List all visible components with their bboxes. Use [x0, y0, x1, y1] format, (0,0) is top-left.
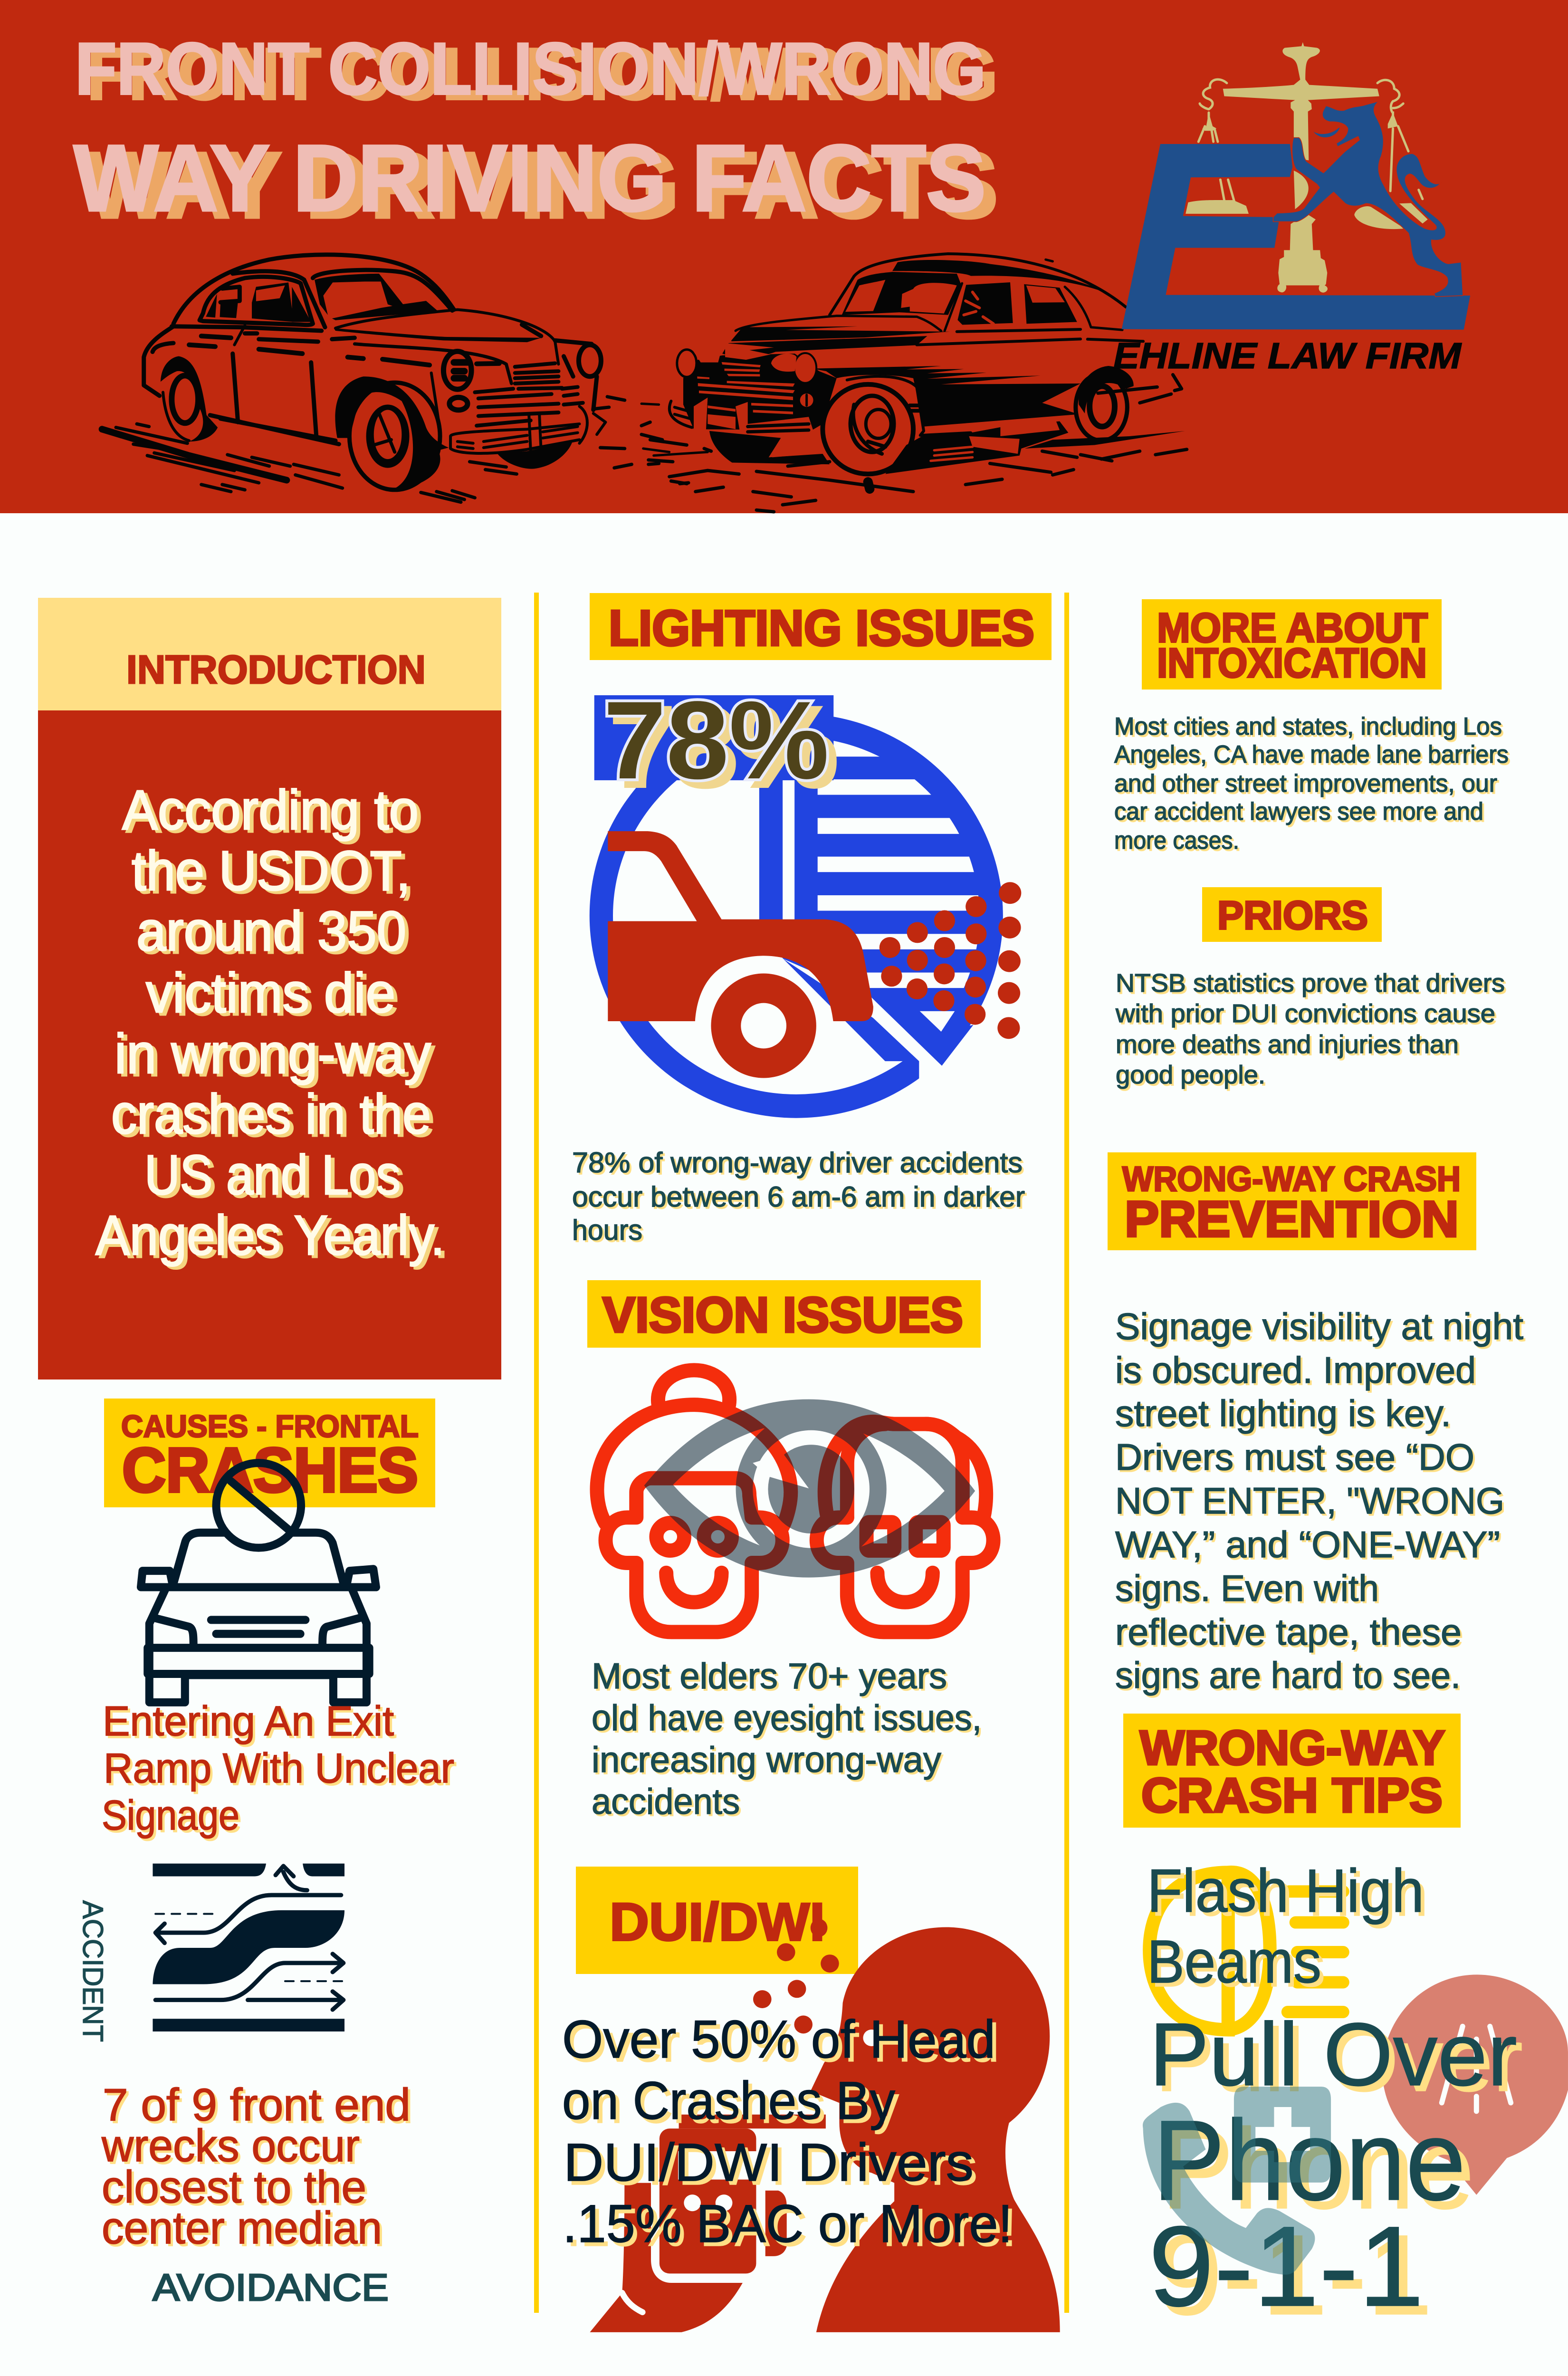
- panel: priors: [1115, 887, 1505, 1089]
- lighting text: occur between 6 am-6 am in darker: [572, 1181, 1025, 1213]
- introduction text: victims die: [146, 962, 395, 1025]
- chart icon: eye pie with car and dots: [590, 695, 1021, 1120]
- DUI text: .15% BAC or More!: [563, 2194, 1013, 2253]
- tips heading: [1140, 1721, 1445, 1822]
- icon: drinker with mug: [590, 1927, 1060, 2332]
- intoxication heading: MORE ABOUT: [1157, 605, 1428, 651]
- introduction text: the USDOT,: [132, 840, 411, 902]
- text: 7 of 9 front end wrecks: center median: [102, 2203, 382, 2253]
- scales of justice: [1186, 42, 1428, 293]
- panel: DUI/DWI: [562, 1867, 1060, 2332]
- panel: causes of frontal crashes: [104, 1399, 435, 1702]
- panel: lighting issues: [572, 593, 1052, 1246]
- introduction text: around 350: [136, 900, 406, 963]
- title: [74, 28, 986, 230]
- icon: road with median: [153, 1864, 344, 2031]
- icon: headlight beams: [1149, 1872, 1343, 2030]
- DUI text: DUI/DWI Drivers: [564, 2133, 974, 2192]
- prevention text: Drivers must see “DO: [1115, 1436, 1474, 1478]
- causes heading: CRASHES: [122, 1435, 418, 1505]
- letter E: [1122, 144, 1470, 330]
- header banner: [0, 0, 1568, 513]
- stat: 78%: 78%: [603, 679, 829, 802]
- priors text: [1115, 969, 1505, 1089]
- introduction text: [96, 779, 445, 1267]
- tips text: Pull Over: [1149, 2004, 1517, 2104]
- tips text: Phone: [1153, 2097, 1466, 2224]
- vertical label: accident: ACCIDENT: [77, 1900, 109, 2042]
- panel: introduction: [38, 598, 501, 1380]
- text: entering an exit ramp: Signage: [102, 1792, 239, 1839]
- lighting text: [572, 1147, 1025, 1246]
- intoxication text: car accident lawyers see more and: [1114, 798, 1483, 825]
- intoxication text: and other street improvements, our: [1114, 770, 1497, 797]
- lion: [1273, 101, 1463, 297]
- DUI text: Over 50% of Head: [562, 2010, 995, 2069]
- icon: speech bubble: [1382, 1974, 1568, 2195]
- tips text: [1147, 1857, 1517, 2330]
- introduction text: According to: [122, 779, 419, 842]
- vision text: accidents: [592, 1782, 740, 1822]
- introduction text: in wrong-way: [115, 1023, 431, 1085]
- prevention text: reflective tape, these: [1115, 1611, 1462, 1653]
- introduction text: US and Los: [144, 1144, 401, 1207]
- icon: phone with medical cross: [1143, 2087, 1331, 2275]
- heading: avoidance: AVOIDANCE: [153, 2266, 389, 2309]
- icon: car with no symbol: [141, 1463, 376, 1702]
- icon: two elderly faces with eye: [597, 1370, 994, 1632]
- prevention text: is obscured. Improved: [1115, 1349, 1476, 1391]
- illustration: left car: [102, 255, 631, 502]
- introduction text: Angeles Yearly.: [96, 1204, 445, 1267]
- priors text: more deaths and injuries than: [1116, 1030, 1459, 1059]
- tips heading: WRONG-WAY: [1140, 1721, 1445, 1775]
- tips text: Flash High: [1147, 1857, 1424, 1925]
- prevention text: signs. Even with: [1115, 1567, 1379, 1609]
- DUI text: [562, 2010, 1013, 2253]
- prevention heading: WRONG-WAY CRASH: [1122, 1160, 1461, 1198]
- lighting heading: LIGHTING ISSUES: [609, 600, 1034, 656]
- intoxication heading: INTOXICATION: [1157, 640, 1427, 686]
- prevention text: [1115, 1305, 1523, 1696]
- priors heading: PRIORS: [1217, 893, 1368, 938]
- prevention text: Signage visibility at night: [1115, 1305, 1523, 1347]
- vision text: [592, 1656, 982, 1822]
- panel: vision issues: [587, 1280, 994, 1822]
- prevention text: street lighting is key.: [1115, 1392, 1451, 1434]
- DUI/DWI heading: DUI/DWI: [610, 1892, 825, 1952]
- intoxication text: Angeles, CA have made lane barriers: [1114, 741, 1509, 768]
- text: entering an exit ramp: Ramp With Unclear: [104, 1744, 454, 1792]
- title: FRONT COLLISION/WRONG: [75, 28, 986, 110]
- priors text: with prior DUI convictions cause: [1115, 999, 1495, 1028]
- causes heading: CAUSES - FRONTAL: [121, 1408, 419, 1444]
- vision text: old have eyesight issues,: [592, 1698, 982, 1738]
- prevention text: WAY,” and “ONE-WAY”: [1115, 1523, 1500, 1565]
- text: 7 of 9 front end wrecks: closest to the: [102, 2162, 366, 2213]
- introduction heading: INTRODUCTION: [126, 647, 426, 692]
- introduction text: crashes in the: [111, 1083, 431, 1146]
- tips heading: CRASH TIPS: [1141, 1768, 1443, 1822]
- intoxication text: [1114, 713, 1509, 854]
- text: 7 of 9 front end wrecks: [101, 2079, 411, 2253]
- prevention heading: PREVENTION: [1125, 1190, 1459, 1247]
- vision text: Most elders 70+ years: [592, 1656, 947, 1696]
- tips text: Beams: [1147, 1928, 1321, 1996]
- vision heading: VISION ISSUES: [602, 1287, 963, 1343]
- text: entering an exit ramp: Entering An Exit: [103, 1697, 394, 1744]
- vision text: increasing wrong-way: [592, 1740, 941, 1780]
- panel: wrong-way crash prevention: [1108, 1152, 1523, 1696]
- priors text: good people.: [1116, 1061, 1265, 1089]
- lighting text: hours: [572, 1214, 642, 1246]
- intoxication heading: [1157, 605, 1428, 686]
- prevention heading: [1122, 1160, 1461, 1247]
- tips text: 9-1-1: [1148, 2203, 1424, 2330]
- title: WAY DRIVING FACTS: [74, 125, 986, 230]
- DUI text: on Crashes By: [562, 2071, 895, 2130]
- illustration: right car: [641, 254, 1187, 512]
- logo wordmark: EHLINE LAW FIRM: [1113, 335, 1462, 376]
- intoxication text: more cases.: [1114, 827, 1239, 854]
- priors text: NTSB statistics prove that drivers: [1116, 969, 1505, 997]
- text: entering an exit ramp: [102, 1697, 454, 1839]
- logo: Ehline Law Firm: [1113, 42, 1470, 376]
- intoxication text: Most cities and states, including Los: [1114, 713, 1502, 740]
- prevention text: signs are hard to see.: [1115, 1654, 1461, 1696]
- panel: wrong-way crash tips: [1123, 1714, 1568, 2330]
- lighting text: 78% of wrong-way driver accidents: [572, 1147, 1023, 1178]
- panel: more about intoxication: [1114, 599, 1509, 854]
- text: 7 of 9 front end wrecks: 7 of 9 front end: [103, 2079, 411, 2130]
- text: 7 of 9 front end wrecks: wrecks occur: [101, 2120, 360, 2171]
- bubbles: [753, 1919, 839, 2033]
- prevention text: NOT ENTER, "WRONG: [1115, 1480, 1504, 1522]
